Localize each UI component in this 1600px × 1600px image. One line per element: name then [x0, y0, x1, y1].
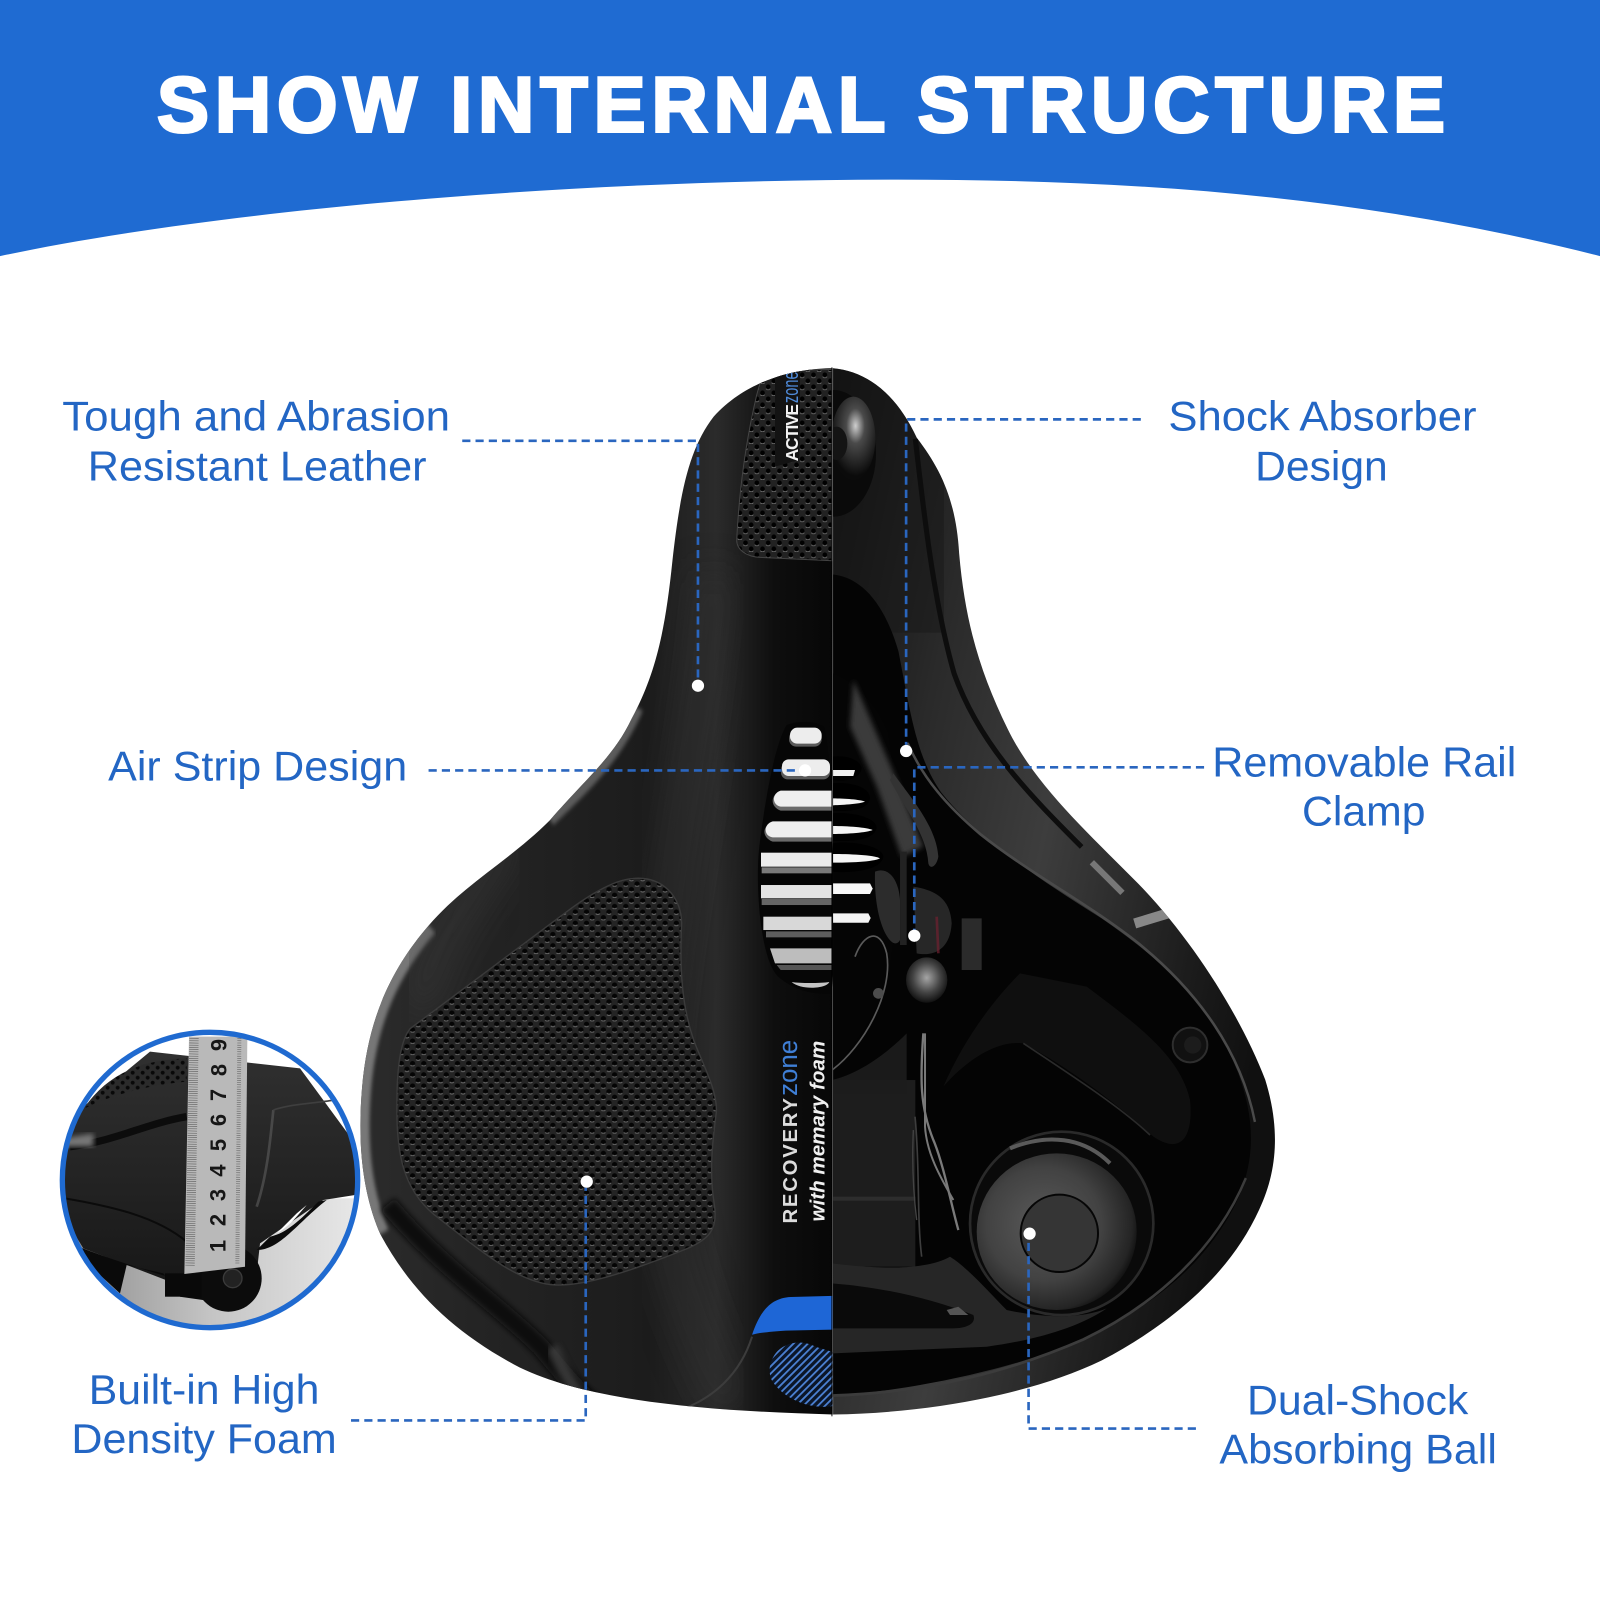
- brand text: recovery zone: with memary foam: [807, 1041, 829, 1221]
- ball housing: [970, 1132, 1153, 1315]
- centre seam: [831, 367, 833, 1416]
- nose perforated pad: [737, 369, 832, 561]
- brand text: active zone: [786, 372, 798, 461]
- ruler: 1: [205, 1240, 230, 1252]
- shock absorber bulb: [833, 390, 876, 516]
- callout: foam: Density Foam: [71, 1415, 337, 1462]
- ruler: 2: [205, 1214, 230, 1226]
- rear big panel: [943, 973, 1191, 1144]
- ruler: 6: [206, 1114, 231, 1126]
- rear chassis: [832, 973, 1207, 1353]
- saddle: exposed internal half: [833, 368, 1275, 1414]
- callout: shock ball: [1023, 1228, 1497, 1472]
- air strip slots: [758, 722, 834, 994]
- bolt: [1173, 1028, 1207, 1062]
- callout: air strip: Air Strip Design: [108, 743, 407, 790]
- callout: tough leather: Resistant Leather: [88, 443, 427, 490]
- ruler: 3: [205, 1189, 230, 1201]
- brand text: recovery zone: [782, 1041, 828, 1222]
- ruler: 4: [205, 1164, 230, 1177]
- ruler: [184, 1037, 247, 1274]
- callout: air strip: [108, 743, 811, 790]
- callout: foam: Built-in High: [89, 1366, 319, 1413]
- rear perforated pad: [397, 878, 716, 1285]
- callout: foam: [71, 1176, 593, 1462]
- dark lower groove: [378, 1198, 599, 1393]
- brand text: recovery zone: RECOVERY: [780, 1098, 802, 1223]
- ruler: 7: [206, 1089, 231, 1101]
- callout: rail clamp: [908, 739, 1516, 942]
- ruler: 5: [206, 1139, 231, 1151]
- title: SHOW INTERNAL STRUCTURE: [157, 63, 1445, 149]
- inner cavity: [833, 575, 1255, 1396]
- callout: rail clamp: Removable Rail: [1212, 739, 1516, 786]
- rail clamp mechanism: [832, 673, 982, 1220]
- callout: shock ball: Absorbing Ball: [1219, 1425, 1497, 1472]
- foam block: [832, 1080, 915, 1267]
- grey rim highlight: [550, 708, 638, 820]
- blue accent: [752, 1296, 833, 1335]
- header banner: [0, 0, 1600, 256]
- brand text: active zone: ACTIVE: [782, 404, 802, 461]
- callout: shock absorber: Design: [1255, 443, 1388, 490]
- callout: shock ball: Dual-Shock: [1247, 1376, 1468, 1423]
- callout: tough leather: Tough and Abrasion: [62, 393, 450, 440]
- ruler: 9: [206, 1039, 231, 1051]
- brand text: active zone: zone: [778, 371, 803, 403]
- brand text: recovery zone: zone: [773, 1040, 803, 1096]
- callout: tough leather: [62, 393, 704, 692]
- callout: rail clamp: Clamp: [1302, 788, 1426, 835]
- callout: shock absorber: Shock Absorber: [1168, 393, 1477, 440]
- hatched blue logo: [770, 1342, 833, 1407]
- callout: shock absorber: [900, 393, 1477, 757]
- cable: [921, 1033, 958, 1230]
- ruler: 8: [206, 1064, 231, 1076]
- grey marks on rim: [1092, 862, 1122, 893]
- inset: height measurement: [60, 1030, 360, 1330]
- saddle: outer cover half: [347, 357, 834, 1429]
